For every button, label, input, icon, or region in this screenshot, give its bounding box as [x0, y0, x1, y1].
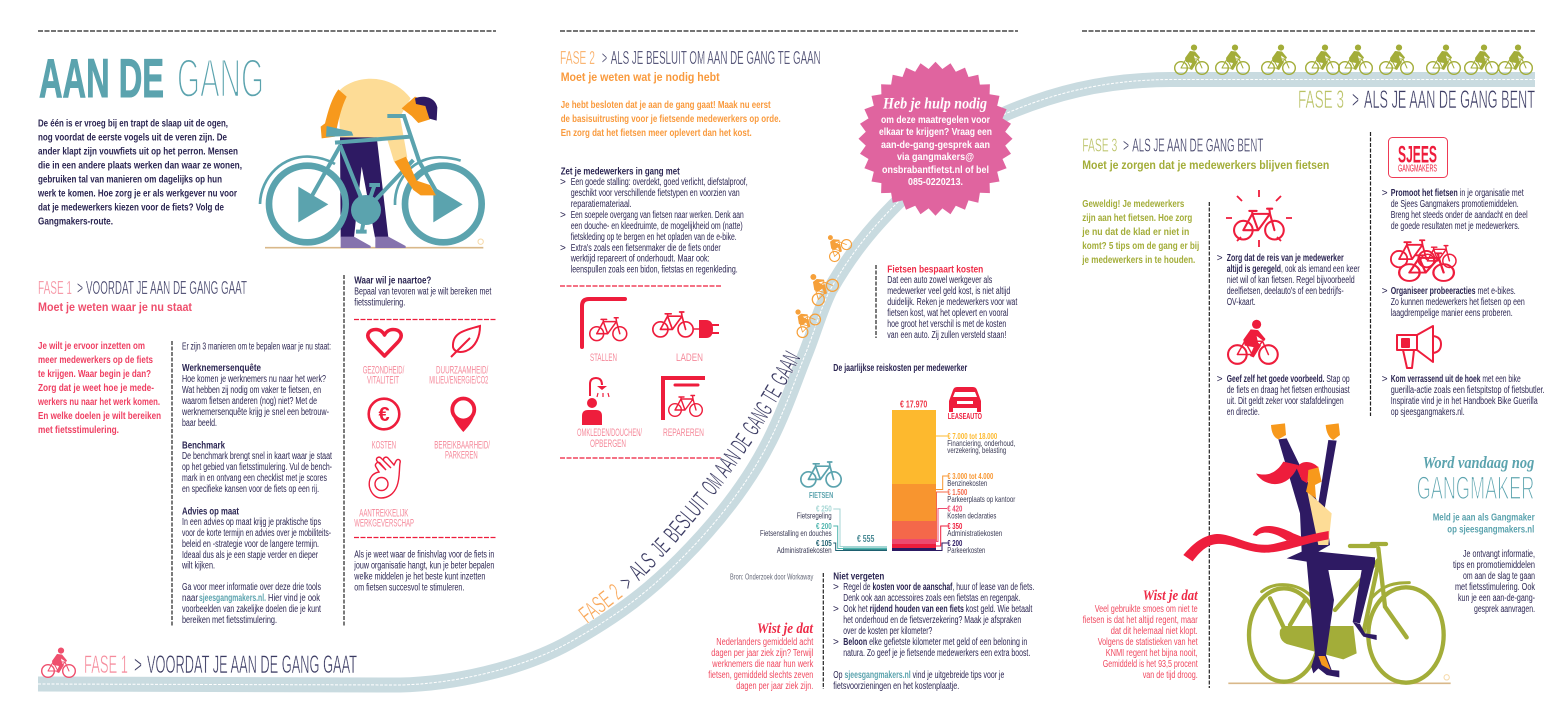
text: niet vergeten: Niet vergeten — [833, 572, 884, 582]
road label: fase 2 diagonal: ALS — [624, 548, 662, 586]
text: zet je medewerkers in gang: > — [560, 210, 566, 221]
callout: hulp nodig badge: om deze maatregelen voor — [881, 114, 990, 126]
text: three ways column: op het gebied van fietsstimulering. Vul de bench- — [182, 462, 332, 473]
heading: fase 3: FASE 3 — [1082, 136, 1117, 156]
callout: wist je dat fase 2: Nederlanders gemiddeld acht — [716, 637, 813, 648]
text: tip 2: Geef zelf het goede voorbeeld. Stap op — [1227, 374, 1350, 385]
labels: lease costs: € 350 — [947, 521, 962, 531]
icon: euro: € — [378, 404, 390, 426]
call to action: gangmaker: Je ontvangt informatie, — [1463, 549, 1535, 560]
text: tip 4: Organiseer probeeracties met e-bikes. — [1391, 286, 1516, 297]
text: fietsen bespaart kosten: medewerker veel geld kost, is niet altijd — [887, 286, 1010, 297]
label: bereikbaarheid: PARKEREN — [445, 449, 478, 461]
road label: fase 3: > — [1352, 86, 1359, 114]
icon: megaphone — [1397, 326, 1441, 368]
icon: leaf — [451, 326, 480, 357]
icon: stallen — [582, 299, 627, 364]
text: tip 2 — [1217, 374, 1350, 418]
text: three ways column: Hier vind je ook — [268, 593, 321, 604]
callout: wist je dat fase 2: werknemers die naar hun werk — [712, 659, 814, 670]
text: fietsen bespaart kosten: fietsen kost, wat het oplevert en vooral — [887, 308, 1008, 319]
text: niet vergeten: Op sjeesgangmakers.nl vind je uitgebreide tips voor je — [833, 670, 1005, 681]
heading: fase 2: ALS JE BESLUIT OM AAN DE GANG TE GAAN — [611, 48, 821, 68]
text: three ways column: Advies op maat — [182, 506, 240, 518]
text: three ways column: bereiken met fietsstimulering. — [182, 615, 277, 626]
text: intro: nog voordat de eerste vogels uit de veren zijn. De — [38, 132, 227, 144]
heading: fase 3: > — [1123, 136, 1129, 156]
text: three ways column: Ideaal dus als je een stapje verder en dieper — [182, 550, 318, 561]
icon: stallen: STALLEN — [590, 352, 617, 364]
text: tip 1: Zorg dat de reis van je medewerker — [1227, 253, 1344, 264]
heading: fase 1 — [38, 278, 247, 314]
text: three ways column: en specifieke kansen voor de fiets op een rij. — [182, 484, 319, 495]
panel: waar wil je naartoe: Als je weet waar de finishvlag voor de fiets in — [354, 550, 494, 560]
text: zet je medewerkers in gang: geschikt voor verschillende fietstypen en voorzien van — [571, 188, 740, 199]
call to action: gangmaker: tips en promotiemiddelen — [1453, 560, 1535, 571]
text: fase 1 lead: Zorg dat je weet hoe je mede- — [38, 382, 154, 394]
road label: fase 1 — [42, 648, 357, 679]
icon: repareren — [663, 378, 705, 439]
call to action: gangmaker: op sjeesgangmakers.nl — [1447, 524, 1534, 536]
road label: fase 2 diagonal: FASE 2 — [574, 579, 627, 629]
labels: lease costs: Benzinekosten — [947, 478, 987, 488]
connectors — [833, 436, 947, 550]
panel: waar wil je naartoe: fietsstimulering. — [354, 298, 405, 308]
text: zet je medewerkers in gang: een douche- en kleedruimte, de mogelijkheid om (natte) — [571, 221, 743, 232]
panel: waar wil je naartoe: welke middelen je het beste kunt inzetten — [354, 572, 485, 582]
text: tip 5: > — [1382, 374, 1388, 385]
text: fase 3 lead — [1081, 198, 1199, 266]
riders: green group on road — [1175, 44, 1532, 74]
icon: bicycle with rays — [1226, 190, 1292, 247]
text: zet je medewerkers in gang — [560, 166, 748, 276]
labels: lease costs: Administratiekosten — [947, 528, 1003, 538]
text: niet vergeten: het onderhoud en de fietsverzekering? Maak je afspraken — [843, 615, 1021, 626]
labels: lease costs: Parkeerplaats op kantoor — [947, 494, 1015, 504]
road label: fase 2 diagonal: BESLUIT — [658, 488, 715, 548]
logo: sjees gangmakers — [1388, 138, 1448, 178]
text: three ways column: werknemersenquête krijg je snel een betrouw- — [181, 407, 329, 418]
road label: fase 3: FASE 3 — [1298, 86, 1344, 114]
text: fase 2 lead — [561, 99, 781, 139]
text: tip 5: op sjeesgangmakers.nl. — [1391, 407, 1465, 418]
label: gezondheid: VITALITEIT — [367, 374, 399, 386]
icon: euro — [369, 399, 399, 429]
text: tip 1: deelfietsen, deelauto's of een bedrijfs- — [1227, 286, 1344, 297]
labels: lease costs: Kosten declaraties — [947, 510, 996, 520]
text: fietsen bespaart kosten: Fietsen bespaart kosten — [887, 264, 983, 276]
text: niet vergeten: > — [833, 582, 839, 593]
label: kosten: KOSTEN — [372, 439, 396, 451]
road label: fase 2 diagonal: GAAN — [765, 347, 806, 390]
labels: lease costs: € 420 — [947, 504, 962, 514]
callout: hulp nodig badge: via gangmakers@ — [897, 151, 974, 163]
text: zet je medewerkers in gang: reparatiemateriaal. — [571, 199, 632, 210]
callout: wist je dat fase 3: KNMI regent het bijna nooit, — [1106, 648, 1198, 659]
text: niet vergeten: natura. Zo geef je je fietsende medewerkers een extra boost. — [843, 648, 1030, 659]
icon: repareren: REPAREREN — [663, 427, 704, 439]
chart: jaarlijkse reiskosten: € 17.970 — [900, 400, 928, 410]
text: tip 5: Kom verrassend uit de hoek met een bike — [1391, 374, 1521, 385]
text: fase 3 lead: Geweldig! Je medewerkers — [1082, 198, 1184, 210]
chart: jaarlijkse reiskosten: FIETSEN — [809, 490, 833, 500]
text: tip 4: laagdrempelige manier eens proberen. — [1391, 308, 1513, 319]
text: three ways column: beleid en -strategie voor de langere termijn. — [182, 539, 319, 550]
callout: wist je dat fase 3: Volgens de statistieken van het — [1098, 637, 1198, 648]
text: zet je medewerkers in gang: leenspullen zoals een bidon, fietstas en regenkleding. — [571, 264, 738, 276]
text: zet je medewerkers in gang: Extra's zoals een fietsenmaker die de fiets onder — [571, 243, 721, 254]
text: zet je medewerkers in gang: Zet je medewerkers in gang met — [561, 166, 680, 178]
label: gezondheid — [363, 364, 405, 386]
text: niet vergeten: Ook het rijdend houden van een fiets kost geld. Wie betaalt — [843, 604, 1032, 615]
text: intro: die in een andere plaats werken dan waar ze wonen, — [38, 160, 242, 172]
label: bereikbaarheid: BEREIKBAARHEID/ — [434, 439, 491, 451]
callout: wist je dat fase 2: dagen per jaar ziek zijn? Terwijl — [711, 648, 813, 659]
road label: fase 1: > — [134, 651, 142, 679]
text: intro: dat je medewerkers kiezen voor de fiets? Volg de — [38, 202, 224, 214]
labels: bike costs: € 250 — [816, 504, 832, 514]
text: tip 3: > — [1382, 188, 1388, 199]
text: three ways column — [181, 342, 332, 626]
text: fase 1 lead: met fietsstimulering. — [38, 424, 119, 436]
label: gezondheid: GEZONDHEID/ — [363, 364, 405, 376]
text: tip 1: niet wil of kan fietsen. Regel bijvoorbeeld — [1227, 275, 1355, 286]
text: tip 2: uit. Dit geldt zeker voor stafafdelingen — [1227, 396, 1344, 407]
call to action: gangmaker: Meld je aan als Gangmaker — [1433, 512, 1535, 524]
road label: fase 2 diagonal: DE — [726, 429, 758, 458]
icon: ok hand — [369, 457, 400, 498]
text: fietsen bespaart kosten — [887, 264, 1017, 341]
icon: car — [949, 387, 981, 412]
text: fietsen bespaart kosten: hoe groot het verschil is met de kosten — [887, 319, 1006, 330]
heading: fase 1: FASE 1 — [38, 278, 72, 298]
text: three ways column: De benchmark brengt snel in kaart waar je staat — [182, 451, 332, 462]
text: fase 1 lead — [37, 340, 161, 436]
callout: wist je dat fase 3: Veel gebruikte smoes om niet te — [1095, 604, 1198, 615]
panel: waar wil je naartoe: Bepaal van tevoren wat je wilt bereiken met — [354, 286, 491, 298]
text: three ways column: sjeesgangmakers.nl. — [199, 593, 266, 604]
text: intro — [37, 118, 242, 228]
text: three ways column: voor de korte termijn en advies over je mobiliteits- — [182, 528, 331, 539]
heading: fase 2: > — [602, 48, 607, 68]
text: tip 3: Promoot het fietsen in je organisatie met — [1391, 188, 1524, 199]
chart: jaarlijkse reiskosten: De jaarlijkse reiskosten per medewerker — [833, 363, 967, 374]
text: zet je medewerkers in gang: > — [560, 177, 566, 188]
illustration: woman cheering on bicycle — [1183, 423, 1451, 683]
labels: lease costs: € 3.000 tot 4.000 — [947, 471, 993, 481]
call to action: gangmaker — [1417, 453, 1536, 615]
text: zet je medewerkers in gang: fietskleding op te bergen en het opladen van de e-bike. — [571, 232, 737, 243]
text: three ways column: Benchmark — [182, 440, 225, 452]
text: niet vergeten: > — [833, 637, 839, 648]
bar: leaseauto stacked — [892, 410, 936, 551]
text: niet vergeten: Regel de kosten voor de aanschaf, huur of lease van de fiets. — [843, 582, 1034, 593]
callout: wist je dat fase 3: Gemiddeld is het 93,5 procent — [1103, 659, 1198, 670]
callout: wist je dat fase 3: fietsen is dat het altijd regent, maar — [1083, 615, 1198, 626]
text: zet je medewerkers in gang: werktijd repareert of onderhoudt. Maar ook: — [570, 254, 710, 264]
text: tip 4: > — [1382, 286, 1388, 297]
text: intro: De één is er vroeg bij en trapt de slaap uit de ogen, — [38, 118, 228, 130]
callout: hulp nodig badge: elkaar te krijgen? Vraag een — [879, 126, 992, 138]
heading: fase 2 — [560, 48, 821, 84]
text: niet vergeten: > — [833, 604, 839, 615]
illustration: man bending over bicycle — [260, 79, 483, 248]
text: three ways column: wilt kijken. — [181, 560, 215, 572]
text: niet vergeten: Denk ook aan accessoires zoals een fietstas en regenpak. — [843, 593, 1020, 604]
callout: wist je dat fase 2: Wist je dat — [757, 621, 814, 637]
labels: lease costs: € 1.500 — [947, 487, 967, 497]
bar: fietsen stacked — [843, 546, 887, 551]
logo: sjees gangmakers: GANGMAKERS — [1398, 163, 1437, 175]
labels: lease costs: € 200 — [947, 538, 962, 548]
labels: lease costs: € 7.000 tot 18.000 — [947, 431, 997, 441]
text: fase 3 lead: komt? 5 tips om de gang er bij — [1082, 240, 1199, 252]
icon: heart — [368, 330, 401, 356]
heading: fase 2: Moet je weten wat je nodig hebt — [561, 72, 720, 84]
label: duurzaamheid — [429, 364, 489, 386]
labels: bike costs — [760, 504, 832, 555]
chart: jaarlijkse reiskosten: LEASEAUTO — [948, 411, 982, 421]
text: three ways column: In een advies op maat krijg je praktische tips — [182, 517, 321, 528]
text: fase 2 lead: Je hebt besloten dat je aan de gang gaat! Maak nu eerst — [561, 99, 771, 111]
road label: fase 2 diagonal: OM — [696, 469, 729, 500]
icon: three bicycles — [1391, 240, 1456, 281]
text: three ways column: mark in en ontvang een checklist met je scores — [182, 473, 327, 484]
chart: jaarlijkse reiskosten — [760, 363, 1015, 555]
text: tip 1 — [1217, 253, 1360, 308]
callout: hulp nodig badge: onsbrabantfietst.nl of bel — [882, 164, 989, 176]
text: fase 1 lead: En welke doelen je wilt bereiken — [38, 410, 161, 422]
icon: teal bicycle — [801, 462, 841, 487]
road — [38, 80, 1535, 685]
callout: hulp nodig badge: aan-de-gang-gesprek aan — [881, 139, 990, 151]
road label: fase 2 diagonal: AAN — [709, 445, 747, 482]
text: fase 1 lead: Je wilt je ervoor inzetten om — [38, 340, 145, 352]
road label: fase 2 diagonal: JE — [646, 533, 676, 562]
icon: omkleden douchen opbergen: OPBERGEN — [590, 438, 626, 450]
label: duurzaamheid: DUURZAAMHEID/ — [436, 364, 489, 376]
text: intro: werk te komen. Hoe zorg je er als werkgever nu voor — [37, 188, 237, 200]
icon: omkleden douchen opbergen: OMKLEDEN/DOUCHEN/ — [577, 427, 642, 439]
panel: waar wil je naartoe — [354, 276, 494, 594]
call to action: gangmaker: met fietsstimulering. Ook — [1455, 582, 1536, 593]
text: tip 5 — [1382, 374, 1545, 418]
heading: fase 1: VOORDAT JE AAN DE GANG GAAT — [86, 278, 247, 298]
text: three ways column: baar beeld. — [182, 418, 217, 429]
heading: fase 1: Moet je weten waar je nu staat — [38, 302, 192, 314]
text: three ways column: voorbeelden van zakelijke doelen die je kunt — [182, 604, 321, 615]
text: three ways column: waarom fietsen anderen (nog) niet? Met de — [181, 396, 317, 407]
icon: laden — [653, 312, 719, 364]
call to action: gangmaker: Word vandaag nog — [1423, 453, 1535, 472]
text: fase 1 lead: meer medewerkers op de fiets — [38, 354, 153, 366]
label: aantrekkelijk werkgeverschap — [354, 508, 414, 530]
text: intro: gebruiken tal van manieren om dagelijks op hun — [38, 174, 222, 186]
callout: wist je dat fase 3: Wist je dat — [1143, 588, 1198, 604]
labels: bike costs: Administratiekosten — [777, 545, 832, 555]
text: tip 3 — [1382, 188, 1528, 232]
road label: fase 1: FASE 1 — [84, 651, 128, 679]
text: tip 2: en directie. — [1227, 407, 1260, 418]
text: fase 1 lead: werkers nu naar het werk komen. — [37, 396, 160, 408]
heading: fase 3 — [1082, 136, 1329, 172]
road label: fase 3 — [1298, 86, 1535, 114]
label: aantrekkelijk werkgeverschap: WERKGEVERSCHAP — [354, 518, 414, 530]
callout: wist je dat fase 2: dagen per jaar ziek zijn. — [736, 681, 813, 692]
callout: hulp nodig badge — [858, 62, 1012, 216]
text: fietsen bespaart kosten: duidelijk. Reken je medewerkers voor wat — [887, 297, 1017, 308]
labels: lease costs — [947, 431, 1015, 555]
labels: bike costs: € 105 — [816, 538, 832, 548]
callout: wist je dat fase 3 — [1083, 588, 1198, 681]
orange riders on the road — [785, 228, 854, 340]
text: fase 2 lead: de basisuitrusting voor je fietsende medewerkers op orde. — [561, 113, 781, 125]
labels: bike costs: Fietsregeling — [797, 510, 832, 520]
call to action: gangmaker: kun je een aan-de-gang- — [1458, 593, 1535, 604]
callout: wist je dat fase 2: fietsen, gemiddeld slechts zeven — [708, 670, 813, 681]
callout: wist je dat fase 2 — [708, 621, 814, 692]
callout: wist je dat fase 3: van de tijd droog. — [1143, 670, 1198, 681]
road label: fase 2 diagonal — [574, 347, 806, 629]
text: niet vergeten: Beloon elke gefietste kilometer met geld of een beloning in — [843, 637, 1027, 648]
road label: fase 2 diagonal: GANG — [737, 397, 779, 440]
text: three ways column: naar — [182, 593, 199, 604]
text: zet je medewerkers in gang: Een goede stalling: overdekt, goed verlicht, diefstalproof, — [571, 177, 748, 188]
text: fase 3 lead: je medewerkers in te houden. — [1082, 254, 1195, 266]
text: three ways column: Er zijn 3 manieren om te bepalen waar je nu staat: — [182, 342, 331, 352]
text: intro: ander klapt zijn vouwfiets uit op het perron. Mensen — [38, 146, 238, 158]
label: duurzaamheid: MILIEU/ENERGIE/CO2 — [429, 374, 488, 386]
title: AAN DE — [39, 47, 164, 109]
text: niet vergeten: over de kosten per kilometer? — [843, 626, 933, 637]
text: zet je medewerkers in gang: > — [560, 243, 566, 254]
text: fase 3 lead: je nu dat de klad er niet in — [1081, 226, 1189, 238]
text: three ways column: Werknemersenquête — [182, 363, 261, 374]
heading: fase 3: ALS JE AAN DE GANG BENT — [1132, 136, 1263, 156]
call to action: gangmaker: gesprek aanvragen. — [1474, 604, 1535, 615]
heading: fase 1: > — [77, 278, 83, 298]
panel: waar wil je naartoe: jouw organisatie hangt, kun je beter bepalen — [354, 560, 494, 572]
text: fietsen bespaart kosten: van een auto. Zij zullen versteld staan! — [887, 330, 1006, 341]
icon: red rider — [1228, 320, 1278, 364]
text: fietsen bespaart kosten: Dat een auto zowel werkgever als — [887, 275, 992, 286]
text: tip 2: > — [1217, 374, 1223, 385]
logo: sjees gangmakers: SJEES — [1398, 141, 1437, 168]
text: tip 1: altijd is geregeld, ook als iemand een keer — [1227, 264, 1360, 275]
text: tip 4 — [1382, 286, 1525, 319]
text: fase 3 lead: zijn aan het fietsen. Hoe zorg — [1082, 212, 1192, 224]
text: fase 1 lead: te krijgen. Waar begin je dan? — [38, 368, 151, 380]
text: tip 1: > — [1217, 253, 1223, 264]
icon: location pin — [452, 398, 474, 432]
icon: laden: LADEN — [676, 352, 703, 364]
text: three ways column: Wat hebben zij nodig om vaker te fietsen, en — [182, 385, 321, 396]
source note: Bron: Onderzoek door Workaway — [730, 572, 813, 582]
callout: hulp nodig badge: 085-0220213. — [908, 176, 963, 188]
chart: jaarlijkse reiskosten: € 555 — [857, 534, 875, 545]
road label: fase 1: VOORDAT JE AAN DE GANG GAAT — [147, 651, 357, 679]
labels: bike costs: Fietsenstalling en douches — [760, 528, 832, 538]
text: three ways column: Hoe komen je werknemers nu naar het werk? — [182, 374, 326, 385]
labels: lease costs: verzekering, belasting — [947, 445, 1006, 455]
labels: bike costs: € 200 — [816, 521, 832, 531]
text: intro: Gangmakers-route. — [38, 216, 113, 228]
text: niet vergeten — [833, 572, 1034, 692]
labels: lease costs: Financiering, onderhoud, — [947, 438, 1015, 448]
icon: omkleden douchen opbergen — [577, 378, 642, 450]
heading: fase 2: FASE 2 — [560, 48, 595, 68]
label: bereikbaarheid — [434, 439, 491, 461]
road label: fase 2 diagonal: TE — [756, 381, 788, 408]
label: aantrekkelijk werkgeverschap: AANTREKKELIJK — [359, 508, 409, 520]
text: tip 1: OV-kaart. — [1227, 297, 1256, 308]
text: three ways column: Ga voor meer informatie over deze drie tools — [182, 582, 321, 593]
panel: waar wil je naartoe: Waar wil je naartoe? — [354, 276, 431, 286]
text: niet vergeten: fietsvoorzieningen en het kostenplaatje. — [833, 681, 959, 692]
callout: wist je dat fase 3: dat dit helemaal niet klopt. — [1111, 626, 1198, 637]
text: fase 2 lead: En zorg dat het fietsen meer oplevert dan het kost. — [561, 127, 752, 139]
callout: hulp nodig badge: Heb je hulp nodig — [882, 96, 987, 112]
panel: waar wil je naartoe: om fietsen succesvol te stimuleren. — [354, 582, 464, 594]
title: GANG — [177, 47, 264, 109]
labels: lease costs: Parkeerkosten — [947, 545, 985, 555]
heading: fase 3: Moet je zorgen dat je medewerkers blijven fietsen — [1082, 160, 1329, 172]
road label: fase 2 diagonal: > — [614, 570, 639, 596]
text: zet je medewerkers in gang: Een soepele overgang van fietsen naar werken. Denk aan — [571, 210, 744, 221]
text: tip 2: de fiets en draag het fietsen enthousiast — [1227, 385, 1350, 396]
